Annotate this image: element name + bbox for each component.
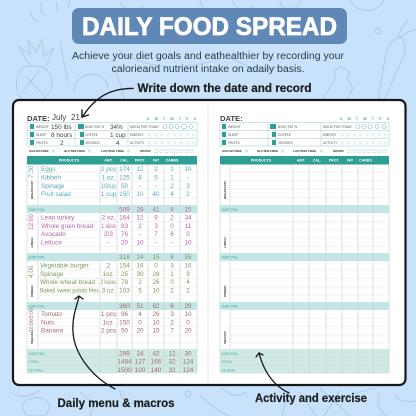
dinner rows: 3 [170,262,174,270]
dinner rows: 360 [119,303,130,310]
dinner rows: 29 [184,303,192,310]
stats box left: MOOD FOR TODAY [130,125,160,129]
caption: daily menu: Daily menu & macros [58,398,174,410]
lunch rows: 0 [186,231,190,238]
snack rows: 50 [121,328,128,334]
stats box right: WEIGHT [228,125,241,129]
dinner rows: 51 [136,303,144,310]
lunch rows: 10 [136,240,144,246]
title pill: DAILY FOOD SPREAD [82,13,337,41]
table header left: PRODUCTS [59,158,80,162]
stats box left: VEGGIES: [85,141,100,145]
lunch rows: - [171,240,173,246]
breakfast rows: 1 oz. [102,174,116,182]
stats box left: 2 [60,140,64,147]
dinner rows: 0 [154,262,158,270]
table header right: AMT. [297,158,305,162]
subtitle text: Achieve your diet goals and eathealthier by recording your [72,51,345,62]
stats box left: ☆☆☆☆☆☆☆☆ [147,132,196,138]
free-from tracker left: WATER [140,149,151,153]
dinner rows: 25 [121,271,128,278]
meal labels right [223,180,227,344]
lunch rows: 11 [185,223,192,230]
breakfast rows: 2 [186,191,190,198]
free-from tracker right: SUGAR FREE [222,149,242,153]
totals rows: 124 [183,367,194,374]
snack rows: Tomato [41,311,62,318]
stats box left: ENERGY [130,133,144,137]
dinner rows: Baked sweet potato fries [40,288,99,294]
totals rows: 12 [168,350,176,358]
lunch rows: 15 [152,254,160,261]
meal labels right: BREAKFAST [223,180,227,199]
dinner rows [28,262,192,310]
breakfast rows: 4 [170,191,174,198]
breakfast rows: 509 [119,206,130,214]
breakfast rows: 1 [170,166,174,173]
date heading right: DATE: [220,114,243,123]
date heading left: July [52,113,66,122]
lunch rows: 6 [170,254,174,261]
subtitle text: calorieand nutrient intake on adaily basis. [112,64,304,75]
snack rows: 0 [138,320,142,326]
breakfast rows: 174 [119,166,130,173]
panel: right page [220,114,389,373]
totals rows: 32 [168,367,176,374]
dinner rows: 16 [184,262,192,270]
totals rows: 127 [135,358,146,366]
dinner rows: 3 oz. [102,288,116,294]
totals rows: 42 [152,350,160,358]
snack rows: 15 [152,328,160,334]
stats box left: SLEEP [36,133,46,137]
free-from tracker right: GLUTEN FREE [257,149,278,153]
lunch rows: 24 [136,254,144,261]
dinner rows: 2 [186,288,190,294]
breakfast rows: 8 [170,206,174,214]
table header left: CAL. [120,158,129,162]
breakfast rows: 12 [136,166,144,173]
subtitle text [72,51,345,75]
dinner rows: SUBTOTAL: [28,304,46,308]
snack rows: 10:00/3:00 [29,308,35,332]
snack rows: 26 [152,311,160,318]
breakfast rows: - [187,174,189,182]
lunch rows: 3 [154,223,158,230]
breakfast rows: 2 [170,183,174,190]
subtotal labels right: TOTAL: [222,360,232,364]
weekdays right: SMTWTFS [340,117,389,121]
totals rows: 166 [151,358,162,366]
totals rows: 24 [136,350,144,358]
subtotal labels right: SUBTOTAL: [222,256,239,260]
snack rows: 150 [119,320,130,326]
totals rows: 299 [119,350,130,358]
table header right: PRODUCTS [251,158,272,162]
panel: left page [27,113,197,374]
stats box right: ENERGY [323,133,337,137]
snack rows: 10 [184,311,192,318]
table header left: CARBS [166,158,179,162]
lunch rows: - [107,240,110,246]
dinner rows: 1 [170,271,174,278]
lunch rows: 318 [119,254,130,261]
totals rows: 140 [151,367,162,374]
lunch rows: Whole grain bread [41,223,94,230]
dinner rows: 62 [152,303,160,310]
totals rows: 1500 [117,367,132,374]
breakfast rows: 10 [184,166,192,173]
dinner rows: 0 [170,279,174,286]
dinner rows: 10 [152,288,160,294]
free-from tracker left: LACTOSE FREE [101,149,124,153]
breakfast rows: Fruit salad [41,191,71,198]
snack rows: Banana [41,328,63,334]
snack rows: 1oz. [102,320,115,326]
stats box left: FRUITS: [36,141,49,145]
free-from tracker right: WATER [333,149,344,153]
dinner rows: 28 [152,271,160,278]
breakfast rows: 2 pcs [101,166,116,173]
dinner rows: 2 loaves [101,279,116,286]
breakfast rows: 7:30 [28,165,35,178]
lunch rows: Lean turkey [41,214,75,222]
stats box right [220,122,389,146]
free-from tracker right: LACTOSE FREE [293,149,316,153]
lunch rows: 76 [121,231,128,238]
breakfast rows: 28 [136,206,144,214]
snack rows: 3 [170,311,174,318]
stats box left: ☆☆☆☆☆☆☆☆ [147,140,196,146]
breakfast rows: 3 [186,183,190,190]
dinner rows: 30 [136,271,144,278]
stats box left: 34% [110,124,123,131]
date heading left: DATE: [27,114,50,123]
lunch rows: 164 [119,214,130,222]
stats box left: 4 [116,140,120,147]
table header right [220,156,389,164]
table header right: PROT. [329,158,339,162]
planner book [13,100,406,385]
dinner rows: 26 [152,279,160,286]
totals rows: 124 [183,358,194,366]
stats box right: BODY FAT % [278,125,297,129]
subtotal labels right: SUBTOTAL: [222,304,239,308]
breakfast rows: 150 [119,191,130,198]
subtotal labels right: SUBTOTAL: [222,352,239,356]
lunch rows: 1 slice [101,223,116,230]
lunch rows: 12:00 [28,214,35,230]
stats box left: 150 lbs [51,124,72,131]
snack rows: 2 [170,320,174,326]
snack rows: SNACKS [30,331,34,344]
table header left: AMT. [104,158,113,162]
breakfast rows [28,165,192,214]
totals rows: SUBTOTAL: [28,352,46,356]
breakfast rows: 125 [119,174,130,182]
dinner rows: Whole wheat bread [40,279,96,286]
food log table right [220,156,389,373]
stats box left: WEIGHT [36,125,49,129]
table header left: FAT [153,158,160,162]
dinner rows: Vegetable burger [40,262,90,270]
dinner rows: 154 [119,262,130,270]
lunch rows: Lettuce [41,240,62,246]
stats box left: COFFEE [85,133,98,137]
totals rows: 1484 [117,358,132,366]
free-from tracker left: GLUTEN FREE [64,149,85,153]
snack rows: 20 [136,328,144,334]
subtotal labels right: SUBTOTAL: [222,208,239,212]
lunch rows: - [155,240,157,246]
totals rows: 100 [135,367,146,374]
stats box right: ACTIVITY [323,141,338,145]
caption: activity: Activity and exercise [255,393,367,405]
lunch rows [28,214,192,261]
stats box right: SLEEP [228,133,238,137]
totals rows [28,350,194,374]
meal labels right: DINNER [223,285,227,297]
snack rows [29,308,192,344]
meal labels right: LUNCH [223,238,227,248]
lunch rows: 55 [184,254,192,261]
free-from tracker left [29,149,193,153]
stats box right: FRUITS: [228,141,241,145]
dinner rows: 78 [121,279,128,286]
dinner rows: 16 [136,262,144,270]
lunch rows: 20 [121,240,128,246]
stats box left: 1 cup [110,132,126,139]
weekdays left: SMTWTFS [147,117,196,121]
dinner rows: 1oz. [102,271,115,278]
lunch rows: 2 oz. [102,214,116,222]
lunch rows: 0 [170,223,174,230]
dinner rows: 4:00 [28,265,35,278]
free-from tracker left: SUGAR FREE [29,149,49,153]
stats box left: ACTIVITY [130,141,145,145]
breakfast rows: 10 [136,191,144,198]
breakfast rows: 1 cup [101,191,117,198]
table header right: CAL. [313,158,321,162]
breakfast rows: 2 [154,166,158,173]
breakfast rows: Eggs [41,166,56,173]
snack rows: 10 [152,320,160,326]
dinner rows: 2 [170,288,174,294]
stats box right: ☆☆☆☆☆☆☆☆ [340,132,388,138]
lunch rows: 2/3 [104,231,113,238]
lunch rows: 10 [184,240,192,246]
dinner rows: DINNER [30,285,34,297]
dinner rows: 103 [119,288,130,294]
lunch rows: - [139,231,141,238]
subtotal labels right: VS GOAL: [222,368,236,372]
table header left [27,156,197,164]
breakfast rows: 15 [184,206,192,214]
free-from tracker right [222,149,386,153]
lunch rows: LUNCH [30,238,34,248]
breakfast rows: BREAKFAST [30,180,34,199]
breakfast rows: 41 [152,206,160,214]
table header right: CARBS [359,158,372,162]
stats box left [27,122,197,147]
snack rows: 4 [138,311,142,318]
stats box right: ☆☆☆☆☆☆☆☆ [340,140,388,146]
breakfast rows: 50 [121,183,128,190]
table header right: FAT [347,158,354,162]
snack rows: 1 pcs [101,311,116,318]
breakfast rows: - [155,183,157,190]
dinner rows: 6 [170,303,174,310]
date heading left [27,113,80,123]
stats box right: COFFEE [278,133,291,137]
lunch rows: 12 [136,214,144,222]
dinner rows: 2 [138,279,142,286]
dinner rows: Spinage [40,271,64,278]
lunch rows: 2 [138,223,142,230]
stats box right: VEGGIES: [278,141,293,145]
breakfast rows: 5 [154,174,158,182]
arrow: to date [82,88,133,117]
lunch rows: 34 [184,214,192,222]
breakfast rows: 8 [138,174,142,182]
breakfast rows: SUBTOTAL: [28,208,46,212]
breakfast rows: - [139,183,141,190]
totals rows: 32 [168,358,176,366]
lunch rows: 83 [121,223,128,230]
snack rows: 2 pcs [101,328,116,334]
subtotal labels right [222,208,239,372]
dinner rows: 4 [186,279,190,286]
snack rows: Nuts [41,320,54,326]
totals rows: TOTAL: [28,360,39,364]
food log table left [27,156,197,374]
arrow: to activity [256,353,289,393]
breakfast rows: 40 [152,191,160,198]
meal labels right: SNACKS [223,331,227,344]
lunch rows: 9 [154,214,158,222]
lunch rows: Avocado [41,231,66,238]
breakfast rows: Spinage [41,183,65,190]
stats box left: BODY FAT % [85,125,104,129]
table header left: PROT. [135,158,145,162]
stats box left: 8 hours [51,132,72,139]
lunch rows: 6 [170,231,174,238]
lunch rows: 7 [154,231,158,238]
callout: write down the date: Write down the date and record [138,83,312,95]
dinner rows: 9 [186,271,190,278]
dinner rows: 5 [138,288,142,294]
stats box right: MOOD FOR TODAY [323,125,353,129]
snack rows: 96 [121,311,128,318]
lunch rows: SUBTOTAL: [28,256,46,260]
snack rows: 0 [186,320,190,326]
totals rows: 30 [184,350,192,358]
breakfast rows: 1 [170,174,174,182]
lunch rows: 2 [170,214,174,222]
breakfast rows: 1/3cup [101,183,116,190]
dinner rows: 2 [107,262,111,270]
totals rows: VS GOAL: [28,368,43,372]
snack rows: 20 [184,328,192,334]
snack rows: 7 [170,328,174,334]
arrow: to menu [73,296,115,389]
breakfast rows: Kibbeh [41,174,61,182]
date heading left: 21 [71,113,80,122]
